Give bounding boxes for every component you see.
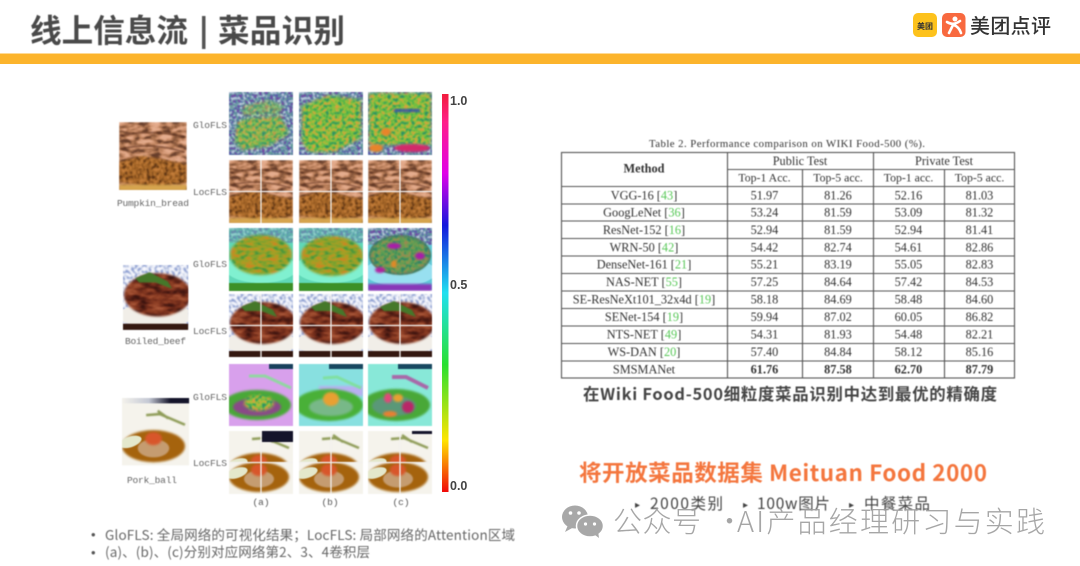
photo: pumpkin bread: [119, 122, 187, 191]
table rows: 82.83: [966, 258, 993, 272]
row labels: GloFLS: [193, 120, 227, 131]
table rows: 84.84: [824, 345, 852, 359]
dataset bullets: ▸: [743, 496, 748, 511]
table rows: 86.82: [966, 310, 993, 324]
table caption: Table 2. Performance comparison on WIKI Food-500 (%).: [649, 138, 925, 150]
colour scale bar: 0.5: [450, 278, 467, 292]
table grid lines: [561, 152, 1015, 378]
table rows: [573, 188, 993, 376]
table rows: SMSMANet: [613, 362, 676, 376]
table rows: 81.59: [824, 206, 852, 220]
table rows: 61.76: [751, 362, 778, 376]
table rows: 57.25: [751, 275, 778, 289]
table rows: 85.16: [966, 345, 993, 359]
dataset bullets: ▸: [635, 496, 640, 511]
photo: boiled beef: [117, 265, 194, 332]
colour scale bar: [442, 94, 467, 493]
row labels: LocFLS: [193, 458, 227, 469]
colour scale bar: 1.0: [450, 94, 467, 108]
table rows: 81.93: [824, 328, 852, 342]
column labels: [252, 497, 410, 508]
footnote bullets: (a)、(b)、(c)分别对应网络第2、3、4卷积层: [105, 541, 370, 561]
header bar: [0, 54, 1080, 64]
table rows: 81.41: [966, 223, 993, 237]
watermark text: AI产品经理研习与实践: [737, 499, 1045, 541]
table header: Public Test: [773, 154, 828, 168]
table rows: SE-ResNeXt101_32x4d [19]: [573, 292, 715, 306]
table rows: 54.48: [895, 328, 922, 342]
table rows: 53.24: [751, 206, 778, 220]
source food photos: [117, 122, 194, 466]
heatmap grid: pumpkin bread GloFLS: [229, 92, 432, 154]
column labels: (b): [321, 497, 339, 508]
title: 菜品识别: [218, 6, 345, 52]
table rows: 84.60: [966, 292, 993, 306]
table rows: 55.05: [895, 258, 922, 272]
footnote bullets: GloFLS: 全局网络的可视化结果；LocFLS: 局部网络的Attention区域: [105, 524, 515, 544]
table rows: DenseNet-161 [21]: [597, 258, 691, 272]
table rows: 52.16: [895, 188, 922, 202]
table rows: 52.94: [895, 223, 922, 237]
watermark: [562, 499, 1045, 541]
table rows: 57.40: [751, 345, 778, 359]
table rows: 58.48: [895, 292, 922, 306]
table rows: NAS-NET [55]: [606, 275, 682, 289]
title: 线上信息流: [30, 6, 188, 52]
icon: chat bubbles: [562, 506, 604, 538]
food name labels: Boiled_beef: [125, 336, 186, 347]
logo group: [913, 10, 1051, 39]
table rows: 84.64: [824, 275, 852, 289]
row labels: [193, 120, 227, 469]
watermark text: 公众号: [613, 499, 701, 541]
table rows: 81.26: [824, 188, 852, 202]
table header: Top-1 Acc.: [738, 170, 791, 184]
table rows: VGG-16 [43]: [611, 188, 677, 202]
dataset bullets: 2000类别: [650, 492, 723, 514]
table rows: WS-DAN [20]: [608, 345, 680, 359]
dataset bullets: 中餐菜品: [864, 492, 930, 514]
table rows: 54.31: [751, 328, 778, 342]
orange dataset headline: 将开放菜品数据集 Meituan Food 2000: [579, 456, 987, 488]
table header: Top-1 acc.: [884, 170, 933, 184]
table rows: 84.69: [824, 292, 852, 306]
table rows: WRN-50 [42]: [610, 240, 678, 254]
table rows: 81.59: [824, 223, 852, 237]
table rows: 87.79: [966, 362, 993, 376]
food name labels: Pumpkin_bread: [117, 198, 189, 209]
heatmap grid: pork ball GloFLS: [223, 364, 432, 426]
food name labels: Pork_ball: [127, 475, 177, 486]
table rows: 52.94: [751, 223, 778, 237]
table header: Top-5 acc.: [955, 170, 1004, 184]
row labels: GloFLS: [193, 392, 227, 403]
row labels: GloFLS: [193, 259, 227, 270]
column labels: (c): [392, 497, 410, 508]
table header: Method: [624, 162, 665, 176]
table rows: 51.97: [751, 188, 778, 202]
table header: Private Test: [915, 154, 974, 168]
detail grid: pumpkin bread LocFLS: [229, 160, 432, 224]
table rows: 82.21: [966, 328, 993, 342]
table header: Top-5 acc.: [813, 170, 863, 184]
title: [30, 6, 345, 52]
table header: [624, 154, 1004, 184]
table rows: SENet-154 [19]: [605, 310, 683, 324]
footnote bullets: •: [91, 545, 96, 560]
table rows: 60.05: [895, 310, 922, 324]
table rows: 54.61: [895, 240, 922, 254]
table rows: 83.19: [824, 258, 852, 272]
watermark text: ·: [715, 499, 744, 541]
detail grid: boiled beef LocFLS: [223, 294, 438, 359]
icon: dianping orange logo: [942, 13, 966, 37]
table rows: 82.86: [966, 240, 993, 254]
colour scale bar: 0.0: [450, 479, 467, 493]
table rows: GoogLeNet [36]: [603, 206, 685, 220]
table rows: 58.12: [895, 345, 922, 359]
footnote bullets: •: [91, 527, 96, 542]
table rows: 87.58: [824, 362, 852, 376]
food name labels: [117, 198, 189, 486]
performance table: [561, 138, 1015, 378]
brand name: 美团点评: [970, 10, 1051, 39]
photo: pork ball: [118, 398, 189, 466]
table rows: 54.42: [751, 240, 778, 254]
table rows: 82.74: [824, 240, 852, 254]
table rows: 59.94: [751, 310, 778, 324]
table rows: 62.70: [895, 362, 922, 376]
detail grid: pork ball LocFLS: [225, 423, 432, 496]
dataset bullets: ▸: [849, 496, 854, 511]
row labels: LocFLS: [193, 187, 227, 198]
column labels: (a): [252, 497, 270, 508]
table rows: 55.21: [751, 258, 778, 272]
row labels: LocFLS: [193, 326, 227, 337]
footnote bullets: [91, 524, 515, 561]
table rows: 53.09: [895, 206, 922, 220]
dataset bullets: [635, 492, 930, 514]
table rows: 87.02: [824, 310, 852, 324]
heatmap grid: boiled beef GloFLS: [225, 228, 436, 291]
table conclusion caption: 在Wiki Food-500细粒度菜品识别中达到最优的精确度: [583, 381, 997, 405]
table rows: 58.18: [751, 292, 778, 306]
table rows: ResNet-152 [16]: [603, 223, 685, 237]
table rows: 81.32: [966, 206, 993, 220]
icon: meituan yellow logo: 美团: [917, 21, 933, 32]
dataset bullets: 100w图片: [757, 492, 830, 514]
table rows: 57.42: [895, 275, 922, 289]
table rows: 81.03: [966, 188, 993, 202]
table rows: 84.53: [966, 275, 993, 289]
table rows: NTS-NET [49]: [607, 328, 681, 342]
